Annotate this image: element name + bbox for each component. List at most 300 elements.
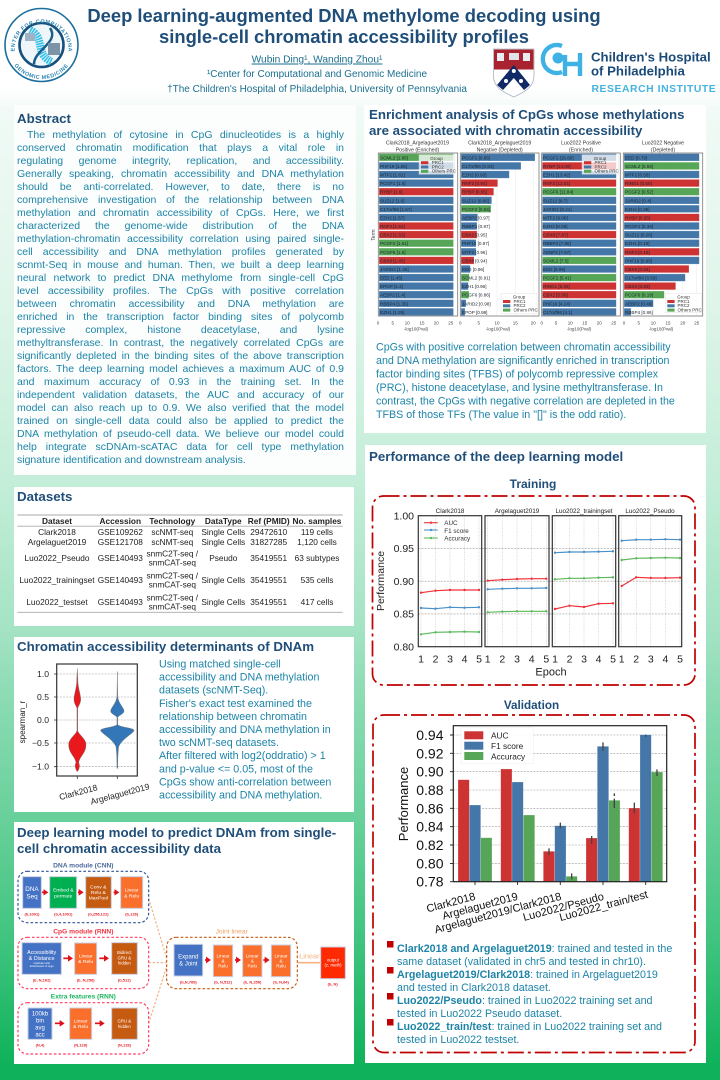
chart: Clark2018_Argelaguet2019 negative: JARID2 [0.98] xyxy=(462,301,491,306)
chromatin description text: accessibility and DNA methylation in xyxy=(159,724,331,736)
authors and affiliations xyxy=(167,54,467,95)
logo: Children's Hospital of Philadelphia: Children's Hospital xyxy=(591,50,711,64)
axes labels: 0.80 xyxy=(394,641,414,653)
logo: Children's Hospital of Philadelphia xyxy=(543,45,716,95)
chart: Clark2018_Argelaguet2019 negative: 20 xyxy=(531,320,536,326)
chart: Clark2018_Argelaguet2019 negative xyxy=(459,140,539,332)
validation bar chart: Clark2018 xyxy=(425,891,477,915)
chart: Argelaguet2019: Argelaguet2019 xyxy=(495,508,540,515)
abstract text: repressive complex, histone deacetylase, and lysine xyxy=(17,324,344,336)
datasets table: 35419551 xyxy=(250,575,288,585)
model architecture diagram: (b,4,1001) xyxy=(54,912,73,917)
datasets table: No. samples xyxy=(293,516,342,526)
legend: PRC2 xyxy=(678,303,690,308)
panel: abstract xyxy=(14,105,356,475)
logo: Children's Hospital of Philadelphia: RESEARCH INSTITUTE xyxy=(592,84,716,95)
chart: Luo2022 negative: Luo2022 Negative xyxy=(642,140,684,146)
model architecture diagram: & Relu xyxy=(124,893,139,899)
chart: Luo2022 positive xyxy=(540,140,620,332)
abstract text: level accessibility profiles. The CpGs with positive correlation xyxy=(17,285,344,297)
datasets table: GSE109262 xyxy=(98,527,143,537)
enrichment heading: Enrichment analysis of CpGs whose methylations xyxy=(369,107,685,122)
chart: Luo2022 negative: RBBP4 [0.86] xyxy=(625,310,653,315)
chart: Clark2018_Argelaguet2019 positive: MTF2 [1.61] xyxy=(380,172,405,178)
chart: Clark2018_Argelaguet2019 positive: SCML2 [1.85] xyxy=(380,155,408,160)
axes labels: 2 xyxy=(433,654,439,666)
chart: Luo2022 negative: EZH1 [0.19] xyxy=(625,241,650,246)
chart: Luo2022_trainingset: Luo2022_trainingset xyxy=(555,508,613,515)
datasets table: Luo2022_trainingset xyxy=(19,575,95,585)
logo: center for computational genomic medicine xyxy=(4,8,79,82)
chart: Luo2022 positive: PCGF1 [15.69] xyxy=(543,155,574,160)
chart: Clark2018_Argelaguet2019 negative: -log10(Pval) xyxy=(486,326,511,332)
chart: Clark2018_Argelaguet2019 positive: 20 xyxy=(434,320,439,326)
chart: Luo2022_Pseudo: Luo2022_Pseudo xyxy=(625,508,675,515)
model architecture diagram: Conv & xyxy=(90,885,107,891)
chart: Clark2018_Argelaguet2019 negative: PCGF1 [0.85] xyxy=(462,155,490,160)
abstract text: methylation and chromatin accessibility of CpGs. Here, we first xyxy=(17,207,344,219)
model architecture diagram: (b, N,64) xyxy=(273,980,290,985)
chart: Luo2022 negative xyxy=(623,140,703,332)
chart: Luo2022 positive: RING1 [5.26] xyxy=(543,284,570,289)
chart: Clark2018_Argelaguet2019 negative: RBBP4 [0.97] xyxy=(462,224,490,229)
legend xyxy=(665,293,703,313)
chart: Clark2018_Argelaguet2019 positive: JARID2 [1.46] xyxy=(380,267,409,272)
chart: Luo2022 positive: RYBP [14.09] xyxy=(543,164,571,169)
panel: enrichment analysis xyxy=(364,105,706,433)
validation notes: tested in Luo2022 Pseudo dataset. xyxy=(397,1008,562,1020)
validation bar chart: 0.92 xyxy=(416,745,444,761)
legend: Others PRC xyxy=(432,169,457,174)
model architecture diagram: downstream of cpgs xyxy=(30,964,54,968)
axes labels: 1 xyxy=(418,654,424,666)
chart: Clark2018_Argelaguet2019 positive: CBX8 [1.45] xyxy=(380,258,405,263)
chromatin description text: Using matched single-cell xyxy=(159,658,281,670)
model architecture diagram: Linear xyxy=(275,953,288,958)
model architecture diagram: upstream and xyxy=(34,961,50,965)
chart: Luo2022 negative: 0 xyxy=(623,320,626,326)
model architecture diagram: hidden xyxy=(118,1024,131,1029)
chart: Clark2018_Argelaguet2019 negative: 15 xyxy=(513,320,518,326)
abstract text: Generally speaking, chromatin accessibility and DNA methylation xyxy=(17,168,344,180)
datasets table: Luo2022_Pseudo xyxy=(24,553,90,563)
abstract heading: Abstract xyxy=(17,111,72,126)
validation notes: Luo2022_train/test: trained in Luo2022 training set and xyxy=(397,1021,662,1033)
axes labels: 3 xyxy=(581,654,587,666)
model architecture diagram xyxy=(18,862,345,1054)
chromatin description text: datasets (scNMT-Seq). xyxy=(159,685,268,697)
model architecture diagram: & Joint xyxy=(179,962,198,968)
model architecture diagram: & xyxy=(221,958,225,963)
datasets table: scNMT-seq xyxy=(151,527,194,537)
validation bar chart: 0.82 xyxy=(416,837,444,853)
chart: Luo2022 positive: EZH1 [13.42] xyxy=(543,172,570,178)
chart: Luo2022 negative: 20 xyxy=(680,320,686,326)
validation bar chart: Luo2022_train/test xyxy=(558,889,649,924)
datasets table: Single Cells xyxy=(201,575,245,585)
chart: Luo2022 positive: PCGF2 [5.41] xyxy=(543,276,571,281)
validation notes: tested in Luo2022 testset. xyxy=(397,1034,519,1046)
chart: Luo2022 positive: SUZ12 [9.7] xyxy=(543,198,568,203)
abstract text: independent validation datasets, the AUC and accuracy of our xyxy=(17,389,344,401)
validation bar chart: Argelaguet2019/Clark2018 xyxy=(433,891,563,936)
legend xyxy=(501,293,539,313)
model architecture diagram: Joint linear xyxy=(216,928,249,935)
legend: PRC1 xyxy=(432,160,444,165)
training chart box xyxy=(372,496,695,685)
model architecture diagram: (b, N,512) xyxy=(214,980,233,985)
datasets table: DataType xyxy=(205,516,242,526)
chart: Luo2022 negative: RYBP [0.35] xyxy=(625,215,650,220)
chart: Luo2022 positive: MTF2 [9.06] xyxy=(543,215,568,220)
chart: Clark2018_Argelaguet2019 negative: EZH2 [0.93] xyxy=(462,172,487,178)
chart: Luo2022 negative: PCGF2 [0.52] xyxy=(625,190,653,195)
chart: Clark2018_Argelaguet2019 positive: EZH1 [1.28] xyxy=(380,310,405,315)
chromatin description text: After filtered with log2(oddratio) > 1 xyxy=(159,750,326,762)
chart: Clark2018_Argelaguet2019 negative: EZH1 [0.96] xyxy=(462,284,487,289)
chart: Luo2022 positive: 10 xyxy=(568,320,573,326)
violin plot: spearman_r xyxy=(18,700,27,743)
chart: Clark2018_Argelaguet2019 negative: AEBP2 [0.97] xyxy=(462,215,490,220)
performance heading: Performance of the deep learning model xyxy=(369,449,623,464)
model architecture diagram: & Relu xyxy=(73,1024,88,1030)
abstract text: The methylation of cytosine in CpG dinucleotides is a highly xyxy=(27,129,344,141)
legend: Group xyxy=(594,156,607,161)
training line charts xyxy=(375,508,683,678)
title: single-cell chromatin accessibility profiles xyxy=(159,26,529,47)
axes labels: 3 xyxy=(447,654,453,666)
datasets table: GSE121708 xyxy=(98,537,143,547)
abstract text: model can also reach up to 0.9. We also verified that the model xyxy=(17,402,344,414)
chart: Clark2018_Argelaguet2019 positive: EPOP [1.4] xyxy=(380,284,403,289)
axes labels: 1.00 xyxy=(394,510,414,522)
model architecture diagram: Relu & xyxy=(91,890,106,896)
datasets table: Technology xyxy=(149,516,196,526)
datasets table: 31827285 xyxy=(250,537,288,547)
chart: Clark2018_Argelaguet2019 negative: Negative (Depleted) xyxy=(477,147,523,153)
abstract text: help integrate scDNAm-scATAC data for cell type methylation xyxy=(17,441,344,453)
chromatin description text: accessibility and DNA methylation. xyxy=(159,790,322,802)
chart: Clark2018_Argelaguet2019 negative: EED [0.96] xyxy=(462,267,484,272)
model architecture diagram: (N,128) xyxy=(74,1043,88,1048)
legend xyxy=(419,155,457,174)
axes labels: 5 xyxy=(677,654,683,666)
datasets table: snmCAT-seq xyxy=(149,579,196,589)
axes labels: 2 xyxy=(499,654,505,666)
legend: PRC2 xyxy=(432,164,444,169)
chart: Luo2022 negative: RING1 [0.55] xyxy=(625,181,652,186)
abstract text: conserved chromatin modification that plays a vital role in xyxy=(17,142,344,154)
model architecture diagram: Linear xyxy=(125,888,139,894)
authors and affiliations: Wubin Ding¹, Wanding Zhou¹ xyxy=(252,54,383,66)
deep learning heading: Deep learning model to predict DNAm from single- xyxy=(17,825,336,840)
validation bar chart: 0.84 xyxy=(416,819,444,835)
validation bar chart: 0.78 xyxy=(416,874,444,890)
datasets table: snmC2T-seq / xyxy=(146,548,199,558)
datasets table: 119 cells xyxy=(301,527,333,537)
chart: Clark2018_Argelaguet2019 positive: 5 xyxy=(391,320,394,326)
abstract text: signature identification and downstream analysis. xyxy=(17,454,246,466)
validation bar chart: Argelaguet2019 xyxy=(441,891,519,923)
chart: Clark2018_Argelaguet2019 positive: 15 xyxy=(419,320,425,326)
chart: Clark2018_Argelaguet2019 negative: C17orf96 [0.93] xyxy=(462,164,494,169)
chart: Clark2018_Argelaguet2019 positive: 10 xyxy=(405,320,410,326)
chart: Clark2018_Argelaguet2019 positive: PHF19 [1.65] xyxy=(380,164,407,169)
chart: Luo2022 positive: AEBP2 [7.67] xyxy=(543,250,571,255)
legend: F1 score xyxy=(444,528,469,535)
model architecture diagram: hidden xyxy=(118,961,131,966)
chart: Luo2022 positive: 20 xyxy=(597,320,602,326)
axes labels: 3 xyxy=(514,654,520,666)
datasets table: Clark2018 xyxy=(38,527,76,537)
chart: Clark2018 xyxy=(418,508,482,647)
chart: Clark2018_Argelaguet2019 positive: RYBP [1.6] xyxy=(380,190,403,195)
chart: Clark2018_Argelaguet2019 positive: 0 xyxy=(377,320,380,326)
violin plot: −0.5 xyxy=(32,738,49,748)
chart: Clark2018_Argelaguet2019 positive xyxy=(371,140,458,332)
axes labels: 0.95 xyxy=(394,543,414,555)
datasets table: 35419551 xyxy=(250,553,288,563)
enrichment bar charts xyxy=(371,140,703,332)
datasets table: 29472610 xyxy=(250,527,288,537)
validation heading: Validation xyxy=(504,699,559,712)
model architecture diagram: (b,N,768) xyxy=(180,980,197,985)
model architecture diagram: Accessibility xyxy=(27,950,57,956)
model architecture diagram: avg xyxy=(35,1025,45,1031)
chart: Clark2018_Argelaguet2019 positive: PCGF1 [1.6] xyxy=(380,181,406,186)
model architecture diagram: (b, N,256) xyxy=(243,980,262,985)
datasets table: Single Cells xyxy=(201,537,245,547)
model architecture diagram: permute xyxy=(54,893,73,899)
abstract text: between chromatin accessibility and DNA methylation are xyxy=(17,298,344,310)
enrichment heading: are associated with chromatin accessibility xyxy=(369,123,643,138)
validation bar chart: 0.88 xyxy=(416,782,444,798)
chart: Luo2022 negative: 15 xyxy=(665,320,671,326)
datasets table: 535 cells xyxy=(301,575,333,585)
datasets table: snmC2T-seq / xyxy=(146,570,199,580)
axes labels: 4 xyxy=(529,654,535,666)
datasets table: scNMT-seq xyxy=(151,537,194,547)
datasets table xyxy=(17,515,343,612)
chart: Clark2018_Argelaguet2019 positive: -log10(Pval) xyxy=(404,326,429,332)
enrichment caption: and DNA methylation are significantly enriched in transcription xyxy=(376,355,670,367)
legend: Group xyxy=(513,295,526,300)
axes labels: 4 xyxy=(662,654,668,666)
chart: Luo2022 positive: RBBP4 [7.85] xyxy=(543,241,571,246)
model architecture diagram: MaxPool xyxy=(89,895,108,901)
model architecture diagram: GRU & xyxy=(117,1019,131,1024)
chart: Clark2018_Argelaguet2019 negative: 10 xyxy=(494,320,500,326)
abstract text: factors. The deep learning model achieves a maximum AUC of 0.9 xyxy=(17,363,344,375)
model architecture diagram: 100kb xyxy=(32,1011,49,1017)
model architecture diagram: (b, N,256) xyxy=(77,977,95,982)
chart: Luo2022 negative: SCML2 [0.59] xyxy=(625,164,653,169)
model architecture diagram: Expand xyxy=(178,955,198,961)
chart: Clark2018_Argelaguet2019 negative: PCGF2 [0.94] xyxy=(462,207,490,212)
chart: Luo2022 negative: PCGF6 [0.19] xyxy=(625,293,653,298)
model architecture diagram: & xyxy=(251,958,255,963)
validation notes: Argelaguet2019/Clark2018: trained in Argelaguet2019 xyxy=(397,969,658,981)
chart: Luo2022 negative: -log10(Pval) xyxy=(649,326,674,332)
abstract text: and maximum accuracy of 0.93 in the training set. In the xyxy=(17,376,344,388)
violin plot: −1.0 xyxy=(32,762,49,772)
model architecture diagram: & Relu xyxy=(78,959,93,965)
header xyxy=(4,5,716,98)
model architecture diagram: Relu xyxy=(276,963,286,968)
authors and affiliations: ¹Center for Computational and Genomic Medicine xyxy=(207,69,427,80)
chart: Clark2018_Argelaguet2019 negative: SCML2 [0.91] xyxy=(462,276,490,281)
validation bar chart: 0.80 xyxy=(416,855,444,871)
datasets table: Luo2022_testset xyxy=(26,597,88,607)
validation notes xyxy=(387,941,672,1046)
chart: Luo2022 negative: 5 xyxy=(637,320,640,326)
datasets table: 35419551 xyxy=(250,597,288,607)
chart: Clark2018_Argelaguet2019 negative: SUZ12 [0.95] xyxy=(462,198,489,203)
abstract text: DNA methylation of pseudo-cell data. We believe our model could xyxy=(17,428,344,440)
chart: Luo2022 negative: PHF19 [0.85] xyxy=(625,258,652,263)
legend: F1 score xyxy=(491,741,524,751)
chart: Clark2018_Argelaguet2019 positive: EED [1.45] xyxy=(380,276,402,281)
chart: Luo2022_trainingset xyxy=(552,508,616,647)
chart: Luo2022_Pseudo xyxy=(619,508,682,647)
validation bar chart xyxy=(396,726,667,936)
chart: Luo2022 positive: Luo2022 Positive xyxy=(561,140,601,146)
datasets table: Pseudo xyxy=(209,553,238,563)
datasets table: Argelaguet2019 xyxy=(28,537,87,547)
validation notes: and tested in Clark2018 dataset. xyxy=(397,982,551,994)
validation bar chart: Performance xyxy=(396,767,411,841)
legend: PRC1 xyxy=(678,299,690,304)
legend: AUC xyxy=(491,730,509,740)
enrichment caption: TFBS of those TFs (The value in "[]" is the odd ratio). xyxy=(376,409,626,421)
axes labels: 1 xyxy=(619,654,625,666)
abstract text: enriched in the transcription factor binding sites of polycomb xyxy=(17,311,344,323)
legend: PRC1 xyxy=(594,160,607,165)
axes labels: 2 xyxy=(567,654,573,666)
axes labels: 1 xyxy=(485,654,491,666)
chromatin heading: Chromatin accessibility determinants of DNAm xyxy=(17,639,314,654)
logo: center for computational genomic medicine: GENOMIC MEDICINE xyxy=(15,64,68,80)
axes labels: 1 xyxy=(552,654,558,666)
model architecture diagram: & xyxy=(279,958,283,963)
violin plot: 0.0 xyxy=(37,715,49,725)
axes labels: Epoch xyxy=(535,666,567,678)
chart: Clark2018_Argelaguet2019 positive: EZH2 [1.57] xyxy=(380,215,405,220)
enrichment caption xyxy=(376,342,675,421)
chart: Luo2022 positive: 0 xyxy=(540,320,543,326)
chart: Luo2022 negative: (Depleted) xyxy=(651,147,675,153)
chart: Luo2022 positive: SCML2 [7.5] xyxy=(543,258,569,263)
chart: Clark2018_Argelaguet2019 negative: Clark2018_Argelaguet2019 xyxy=(468,140,531,146)
legend: Group xyxy=(430,156,443,161)
validation notes: Luo2022/Pseudo: trained in Luo2022 training set and xyxy=(397,995,653,1007)
legend: Others PRC xyxy=(514,307,539,312)
enrichment caption: factor binding sites (TFBS) of polycomb repressive complex xyxy=(376,368,659,380)
abstract text: methylation-chromatin accessibility correlation using paired single- xyxy=(17,233,344,245)
chart: Luo2022 positive: PCGF6 [11.84] xyxy=(543,190,573,195)
model architecture diagram: (b,512) xyxy=(118,977,131,982)
model architecture diagram: Bidirect xyxy=(117,950,132,955)
model architecture diagram: output xyxy=(327,958,340,963)
model architecture diagram: DNA module (CNN) xyxy=(53,862,114,869)
datasets table: snmC2T-seq / xyxy=(146,592,199,602)
model architecture diagram: (b,128) xyxy=(125,912,139,917)
abstract text xyxy=(17,129,344,466)
axes labels xyxy=(375,510,683,678)
model architecture diagram: Extra features (RNN) xyxy=(51,993,116,1000)
datasets table: GSE140493 xyxy=(98,553,143,563)
chart: Luo2022 negative: 10 xyxy=(651,320,656,326)
axes labels: Performance xyxy=(375,551,387,611)
title xyxy=(87,5,601,47)
chromatin description text: Fisher's exact test examined the xyxy=(159,698,312,710)
datasets table: GSE140493 xyxy=(98,575,143,585)
model architecture diagram: Linear xyxy=(299,952,320,961)
chart: Luo2022 positive: EED [5.99] xyxy=(543,267,565,272)
chart: Luo2022 positive: EZH2 [8.09] xyxy=(543,224,568,229)
chart: Clark2018_Argelaguet2019 negative: MTF2 [0.96] xyxy=(462,250,487,255)
chart: Clark2018_Argelaguet2019 positive: AEBP2 [1.4] xyxy=(380,293,405,298)
chart: Luo2022 positive: 25 xyxy=(611,320,617,326)
chart: Clark2018: Clark2018 xyxy=(436,508,465,515)
chart: Clark2018_Argelaguet2019 negative: CBX2 [0.95] xyxy=(462,233,487,238)
deep learning heading xyxy=(17,825,336,856)
chart: Clark2018_Argelaguet2019 positive: SUZ12 [1.6] xyxy=(380,198,405,203)
legend: PRC2 xyxy=(514,303,526,308)
datasets table: Dataset xyxy=(42,516,72,526)
chart: Luo2022 negative: 25 xyxy=(694,320,700,326)
model architecture diagram: Linear xyxy=(217,953,230,958)
model architecture diagram: Relu xyxy=(218,963,228,968)
model architecture diagram: Linear xyxy=(246,953,259,958)
chart: Luo2022 negative: JARID2 [0.4] xyxy=(625,198,651,203)
legend xyxy=(461,728,533,763)
abstract text: scnmt-Seq in mouse and human. Then, we built a deep learning xyxy=(17,259,344,271)
chart: Clark2018_Argelaguet2019 positive: PCGF6 [1.5] xyxy=(380,250,406,255)
chart: Clark2018_Argelaguet2019 positive: Positive (Enriched) xyxy=(396,147,440,153)
chart: Luo2022 negative: AEBP2 [0.46] xyxy=(625,301,653,306)
datasets heading: Datasets xyxy=(17,489,72,504)
datasets table: 1,120 cells xyxy=(297,537,337,547)
chart: Clark2018_Argelaguet2019 positive: PCGF2 [1.51] xyxy=(380,241,408,246)
chart: Luo2022 positive: RNF2 [12.51] xyxy=(543,181,570,186)
enrichment caption: CpGs with positive correlation between chromatin accessibility xyxy=(376,342,671,354)
chart: Clark2018_Argelaguet2019 negative: RYBP [0.95] xyxy=(462,190,487,195)
chart: Luo2022 positive: CBX8 [7.87] xyxy=(543,233,568,238)
axes labels: 0.85 xyxy=(394,609,414,621)
axes labels: 4 xyxy=(462,654,468,666)
model architecture diagram: Embed & xyxy=(53,888,74,894)
chart: Luo2022 negative: C17orf96 [0.59] xyxy=(625,276,657,281)
deep learning heading: cell chromatin accessibility data xyxy=(17,841,222,856)
model architecture diagram: (b, N,162) xyxy=(33,977,51,982)
chart: Luo2022 positive: PHF19 [4.24] xyxy=(543,301,570,306)
axes labels: 4 xyxy=(596,654,602,666)
chart: Luo2022 negative: MTF2 [0.56] xyxy=(625,172,650,178)
chart: Luo2022 negative: CBX2 [0.83] xyxy=(625,284,650,289)
chart: Clark2018_Argelaguet2019 positive: CBX2 [1.53] xyxy=(380,233,405,238)
chart: Luo2022 positive: 5 xyxy=(555,320,558,326)
chromatin description text: accessibility and DNA methylation xyxy=(159,672,319,684)
model architecture diagram: (b,1001) xyxy=(24,912,40,917)
abstract text: characterized the genome-wide distribution of the DNA xyxy=(17,220,344,232)
enrichment caption: (PRC), histone deacetylase, and lysine methyltransferase. In xyxy=(376,382,663,394)
axes labels: 0.90 xyxy=(394,576,414,588)
abstract text: neural network to predict DNA methylome from single-cell CpG xyxy=(17,272,344,284)
datasets table: GSE140493 xyxy=(98,597,143,607)
chart: Clark2018_Argelaguet2019 negative: CBX8 [0.94] xyxy=(462,258,487,263)
chart: Clark2018_Argelaguet2019 negative: EPOP [0.98] xyxy=(462,310,487,315)
